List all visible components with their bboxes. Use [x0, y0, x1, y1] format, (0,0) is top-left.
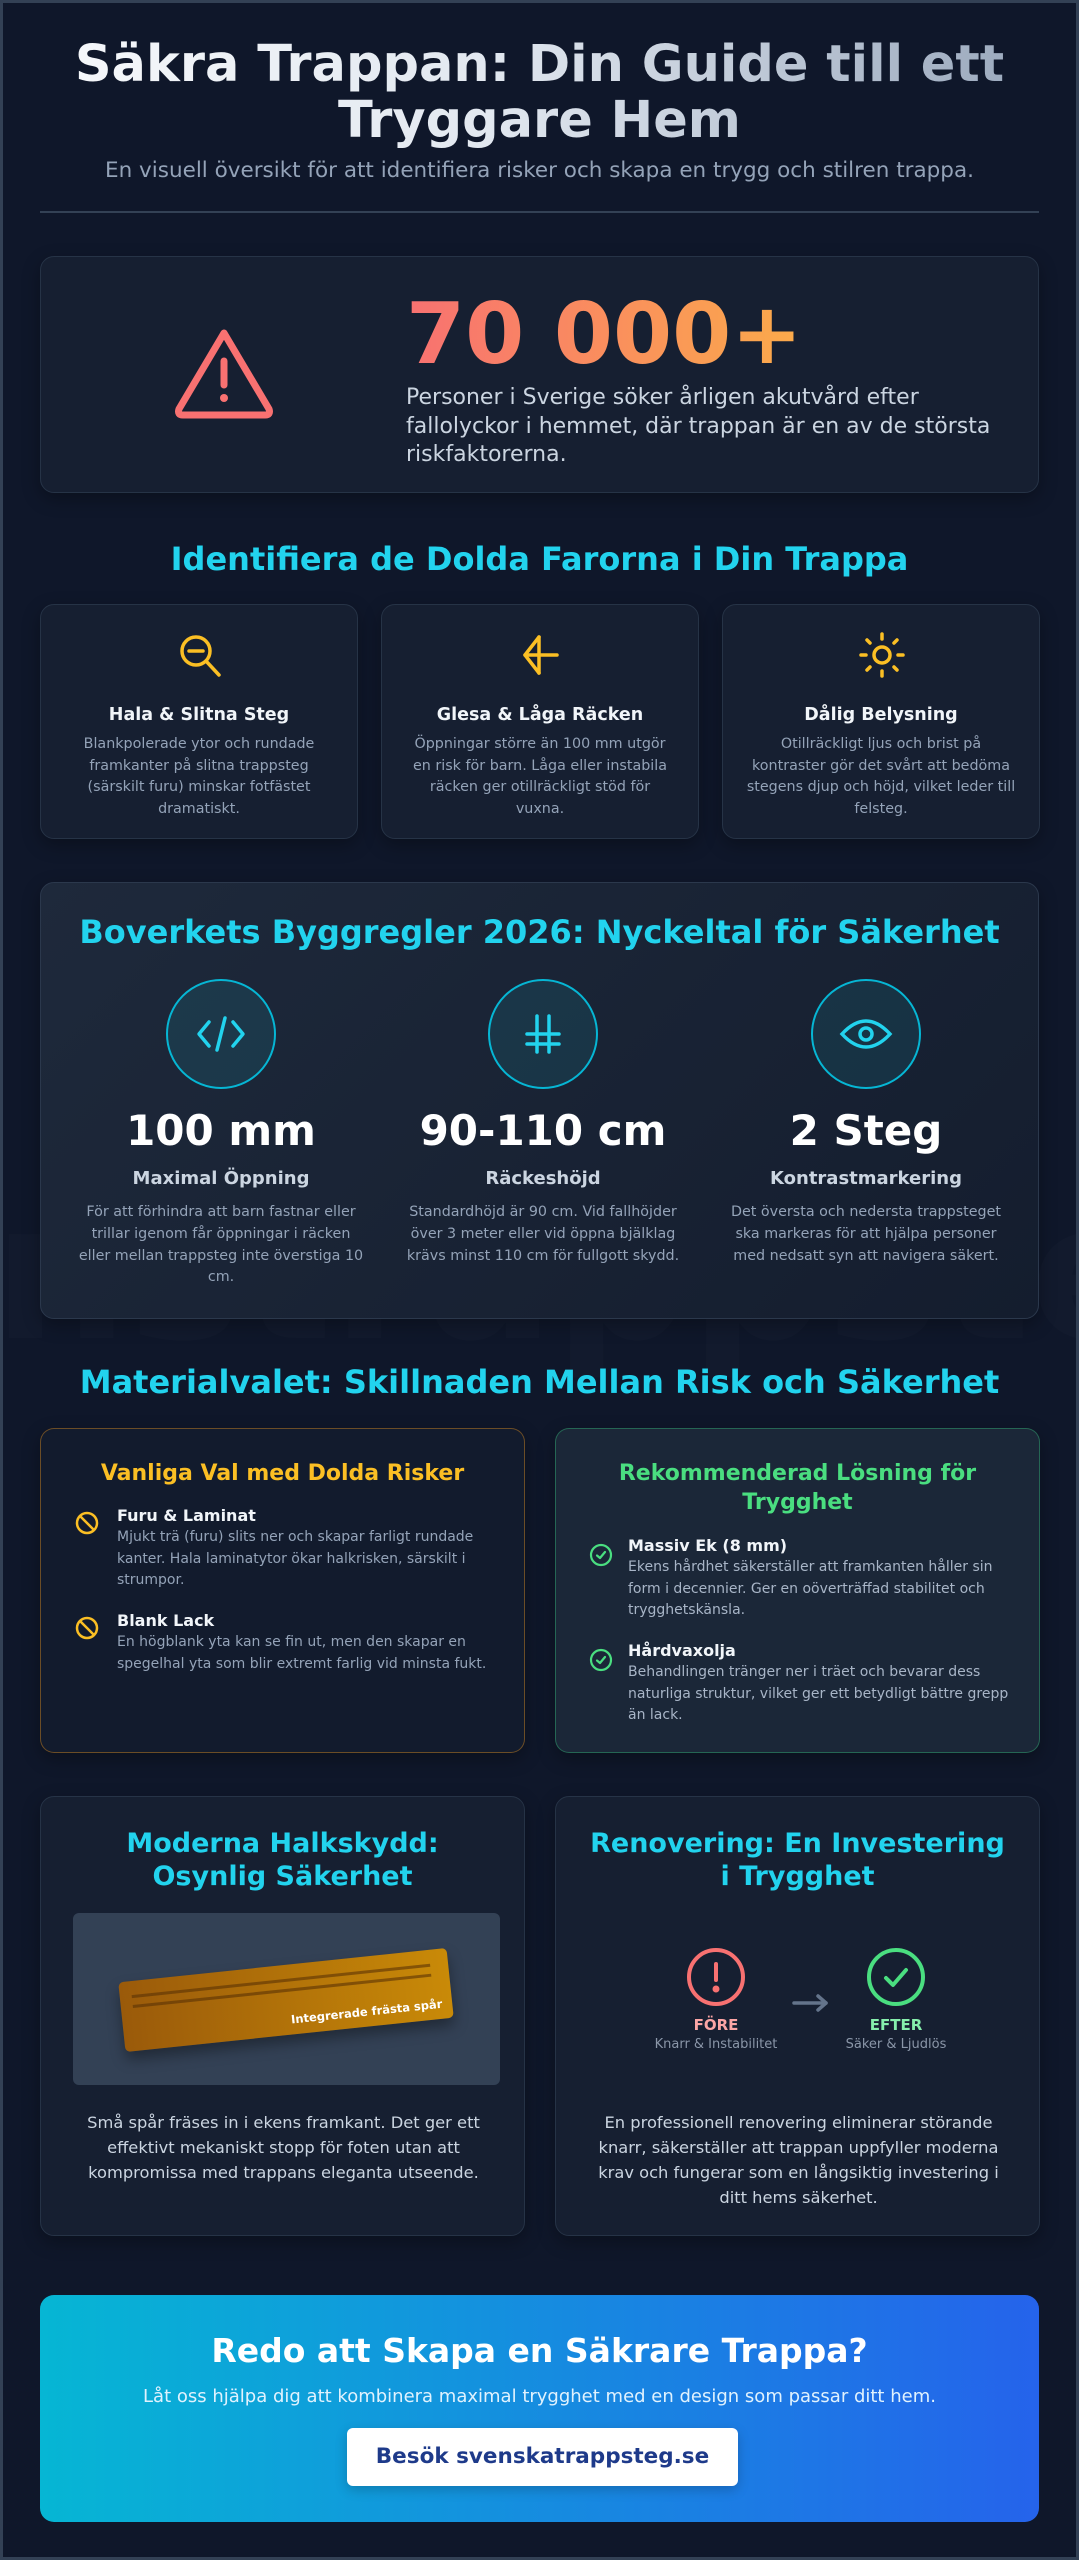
big number: 70 000+	[406, 285, 803, 384]
heading: hazards: Identifiera de Dolda Farorna i Din Trappa	[171, 540, 908, 578]
illustration: grooved step	[73, 1913, 500, 2085]
heading: materials: Materialvalet: Skillnaden Mellan Risk och Säkerhet	[80, 1363, 999, 1401]
icon: before: FÖRE	[694, 2016, 738, 2034]
item: glossy lacquer: Blank Lack	[117, 1611, 214, 1630]
panel: building regulations: Räckeshöjd	[485, 1168, 601, 1189]
panel: hazard 1	[40, 604, 358, 839]
panel: anti-slip	[40, 1796, 525, 2236]
call to action: Redo att Skapa en Säkrare Trappa?	[211, 2331, 868, 2370]
panel: recommended materials: Rekommenderad Lösning för	[619, 1461, 976, 1486]
icon: search	[180, 635, 221, 677]
panel: hazard 2: Öppningar större än 100 mm utgör en risk för barn. Låga eller instabila räcken ger otillräckligt stöd för vuxna.	[413, 736, 667, 817]
panel: building regulations: Maximal Öppning	[133, 1168, 309, 1189]
icon: before: Knarr & Instabilitet	[655, 2037, 777, 2052]
heading: regulations: Boverkets Byggregler 2026: Nyckeltal för Säkerhet	[79, 913, 1000, 951]
panel: building regulations: 90-110 cm	[420, 1106, 666, 1155]
panel: building regulations: För att förhindra att barn fastnar eller trillar igenom får öppningar i räcken eller mellan trappsteg inte överstiga 10 cm.	[79, 1204, 363, 1285]
panel: renovation	[555, 1796, 1040, 2236]
panel: hazard 2	[381, 604, 699, 839]
panel: building regulations: Kontrastmarkering	[770, 1168, 962, 1189]
item: glossy lacquer: En högblank yta kan se fin ut, men den skapar en spegelhal yta som blir extremt farlig vid minsta fukt.	[117, 1634, 486, 1672]
stat: contrast	[731, 979, 1001, 1264]
panel: hazard 2: Glesa & Låga Räcken	[437, 705, 643, 725]
icon: sun	[859, 632, 905, 678]
item: oak	[590, 1536, 993, 1618]
icon: eye	[811, 979, 921, 1089]
item: pine: Furu & Laminat	[117, 1506, 256, 1525]
stat: railing height	[407, 979, 679, 1264]
item: hardwax oil	[590, 1641, 1008, 1723]
panel: hazard 3	[722, 604, 1040, 839]
call to action: Låt oss hjälpa dig att kombinera maximal trygghet med en design som passar ditt hem.	[143, 2386, 936, 2407]
title: Säkra Trappan: Din Guide till ett	[75, 35, 1004, 94]
title	[3, 37, 1076, 149]
stat: opening	[79, 979, 363, 1285]
panel: anti-slip: Små spår fräses in i ekens framkant. Det ger ett effektivt mekaniskt stopp för foten utan att kompromissa med trappans eleganta utseende.	[87, 2113, 480, 2182]
item: oak: Massiv Ek (8 mm)	[628, 1536, 787, 1555]
panel: building regulations: 100 mm	[126, 1106, 316, 1155]
icon: before	[655, 1948, 778, 2052]
panel: recommended materials: Trygghet	[742, 1490, 853, 1515]
item: glossy lacquer	[76, 1611, 486, 1672]
panel: anti-slip: Moderna Halkskydd:	[126, 1828, 439, 1859]
icon: after	[846, 1948, 946, 2052]
panel: hazard 1: Hala & Slitna Steg	[109, 705, 289, 725]
icon: code	[166, 979, 276, 1089]
icon: railing	[523, 635, 559, 675]
panel: building regulations: 2 Steg	[790, 1106, 942, 1155]
panel: building regulations	[40, 882, 1039, 1319]
illustration: grooved step: Integrerade frästa spår	[290, 1997, 443, 2027]
panel: building regulations: Det översta och nedersta trappsteget ska markeras för att hjälpa personer med nedsatt syn att navigera säkert.	[731, 1204, 1001, 1264]
item: pine	[76, 1506, 473, 1588]
panel: risky materials	[40, 1428, 525, 1753]
item: hardwax oil: Behandlingen tränger ner i träet och bevarar dess naturliga struktur, vilket ger ett betydligt bättre grepp än lack.	[628, 1664, 1008, 1723]
item: hardwax oil: Hårdvaxolja	[628, 1641, 736, 1660]
title: Tryggare Hem	[338, 91, 741, 150]
arrow	[792, 1994, 828, 2012]
stat description: Personer i Sverige söker årligen akutvård efter fallolyckor i hemmet, där trappan är en av de största riskfaktorerna.	[406, 385, 990, 467]
panel: risky materials: Vanliga Val med Dolda Risker	[101, 1461, 464, 1486]
panel: building regulations: Standardhöjd är 90 cm. Vid fallhöjder över 3 meter eller vid öppna bjälklag krävs minst 110 cm för fullgott skydd.	[407, 1204, 679, 1264]
panel: anti-slip: Osynlig Säkerhet	[152, 1861, 413, 1892]
icon: warning	[175, 330, 273, 418]
panel: recommended materials	[555, 1428, 1040, 1753]
panel: renovation: i Trygghet	[720, 1861, 875, 1892]
panel: renovation: En professionell renovering eliminerar störande knarr, säkerställer att trappan uppfyller moderna krav och fungerar som en långsiktig investering i ditt hems säkerhet.	[598, 2113, 999, 2207]
panel: hazard 3: Otillräckligt ljus och brist på kontraster gör det svårt att bedöma stegens djup och höjd, vilket leder till felsteg.	[747, 736, 1015, 817]
panel: hazard 1: Blankpolerade ytor och rundade framkanter på slitna trappsteg (särskilt furu) minskar fotfästet dramatiskt.	[84, 736, 314, 817]
button: Besök svenskatrappsteg.se	[376, 2444, 709, 2469]
call to action	[40, 2295, 1039, 2522]
icon: after: Säker & Ljudlös	[846, 2037, 946, 2052]
item: oak: Ekens hårdhet säkerställer att framkanten håller sin form i decennier. Ger en oöverträffad stabilitet och trygghetskänsla.	[628, 1559, 993, 1618]
panel: statistic	[40, 256, 1039, 493]
icon: after: EFTER	[870, 2016, 922, 2034]
icon: ruler	[488, 979, 598, 1089]
item: pine: Mjukt trä (furu) slits ner och skapar farligt rundade kanter. Hala laminatytor ökar halkrisken, särskilt i strumpor.	[117, 1529, 473, 1588]
panel: hazard 3: Dålig Belysning	[804, 705, 958, 725]
subtitle: En visuell översikt för att identifiera risker och skapa en trygg och stilren trappa.	[105, 158, 974, 183]
button	[347, 2428, 738, 2486]
panel: renovation: Renovering: En Investering	[590, 1828, 1005, 1859]
